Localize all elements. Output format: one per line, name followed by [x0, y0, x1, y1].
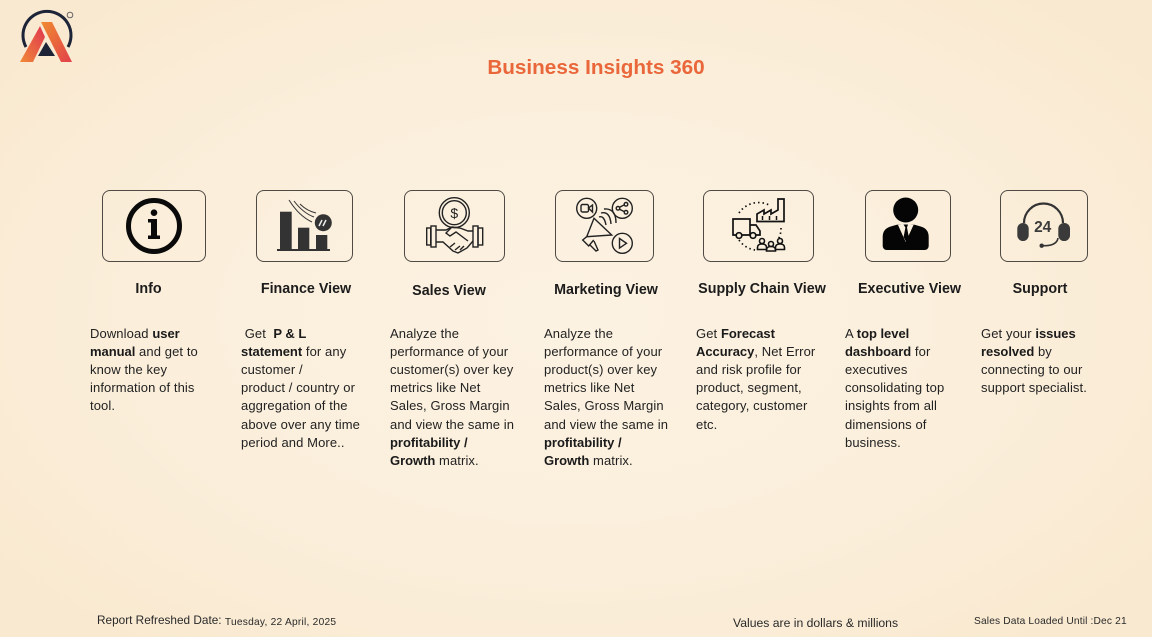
heading: Marketing View: Marketing View — [554, 282, 658, 298]
text: Executive View: dimensions of — [845, 417, 927, 432]
text: Marketing View: product(s) over key — [544, 362, 657, 377]
text: Executive View: dashboard for — [845, 344, 930, 359]
icon: sales handshake — [404, 190, 505, 262]
icon: headset 24: 24 — [1034, 219, 1052, 236]
title: Business Insights 360 — [487, 56, 705, 79]
text: Executive View: consolidating top — [845, 380, 944, 395]
text: Supply Chain View: Accuracy, Net Error — [696, 344, 815, 359]
text: Sales View — [390, 326, 514, 468]
panel: Supply Chain View — [696, 190, 826, 432]
icon: finance chart — [256, 190, 353, 262]
heading: Supply Chain View: Supply Chain View — [698, 281, 826, 297]
text: Executive View — [845, 326, 944, 450]
heading: Support: Support — [1013, 281, 1067, 297]
text: Sales View: and view the same in — [390, 417, 514, 432]
text: Finance View: aggregation of the — [241, 398, 348, 413]
panel: Info — [90, 190, 206, 413]
text: Supply Chain View: product, segment, — [696, 380, 802, 395]
panel: Finance View — [241, 190, 360, 450]
panel: Support — [981, 190, 1088, 395]
text: Support: resolved by — [981, 344, 1052, 359]
footer: report refreshed date: Report Refreshed Date: Tuesday, 22 April, 2025 — [97, 613, 336, 628]
text: Support: Get your issues — [981, 326, 1076, 340]
text: Finance View: period and More.. — [241, 435, 345, 450]
text: Executive View: executives — [845, 362, 907, 377]
text: Finance View — [241, 326, 360, 450]
text: Marketing View: Growth matrix. — [544, 453, 633, 468]
text: Finance View: Get P & L — [245, 326, 306, 340]
text: Marketing View — [544, 326, 668, 468]
text: Supply Chain View: and risk profile for — [696, 362, 801, 377]
text: Executive View: insights from all — [845, 398, 937, 413]
text: Info: Download user — [90, 326, 180, 340]
text: Executive View: business. — [845, 435, 901, 450]
panel: Executive View — [845, 190, 961, 450]
heading: Info: Info — [135, 281, 162, 297]
icon: supply chain — [703, 190, 814, 262]
footer: sales data loaded: Sales Data Loaded Until :Dec 21 — [974, 616, 1127, 627]
text: Support: connecting to our — [981, 362, 1082, 377]
text: Finance View: above over any time — [241, 417, 360, 432]
text: Sales View: profitability / — [390, 435, 468, 450]
footer: values note: Values are in dollars & millions — [733, 616, 898, 630]
text: Info — [90, 326, 198, 413]
text: Sales View: Growth matrix. — [390, 453, 479, 468]
text: Info: information of this — [90, 380, 195, 395]
text: Marketing View: Analyze the — [544, 326, 613, 340]
text: Finance View: product / country or — [241, 380, 355, 395]
icon: executive — [865, 190, 951, 262]
text: Sales View: Sales, Gross Margin — [390, 398, 510, 413]
text: Supply Chain View: etc. — [696, 417, 717, 432]
text: Marketing View: performance of your — [544, 344, 662, 359]
heading: Finance View: Finance View — [261, 281, 351, 297]
icon: info — [102, 190, 206, 262]
text: Supply Chain View: Get Forecast — [696, 326, 775, 340]
icon: sales handshake: $ — [450, 205, 458, 221]
text: Sales View: customer(s) over key — [390, 362, 513, 377]
icon: marketing megaphone — [555, 190, 654, 262]
text: Support — [981, 326, 1087, 395]
text: Marketing View: and view the same in — [544, 417, 668, 432]
text: Marketing View: metrics like Net — [544, 380, 634, 395]
text: Sales View: metrics like Net — [390, 380, 480, 395]
text: Support: support specialist. — [981, 380, 1087, 395]
icon: headset 24 — [1000, 190, 1088, 262]
text: Finance View: statement for any — [241, 344, 346, 359]
text: Finance View: customer / — [241, 362, 303, 377]
text: Info: manual and get to — [90, 344, 198, 359]
text: Supply Chain View — [696, 326, 815, 432]
panel: Marketing View — [544, 190, 668, 468]
text: Sales View: Analyze the — [390, 326, 459, 340]
text: Executive View: A top level — [845, 326, 909, 340]
heading: Executive View: Executive View — [858, 281, 961, 297]
text: Marketing View: profitability / — [544, 435, 622, 450]
text: Info: tool. — [90, 398, 115, 413]
heading: Sales View: Sales View — [412, 283, 486, 299]
text: Info: know the key — [90, 362, 167, 377]
logo — [20, 10, 74, 62]
text: Sales View: performance of your — [390, 344, 508, 359]
panel: Sales View — [390, 190, 514, 468]
text: Marketing View: Sales, Gross Margin — [544, 398, 664, 413]
text: Supply Chain View: category, customer — [696, 398, 807, 413]
